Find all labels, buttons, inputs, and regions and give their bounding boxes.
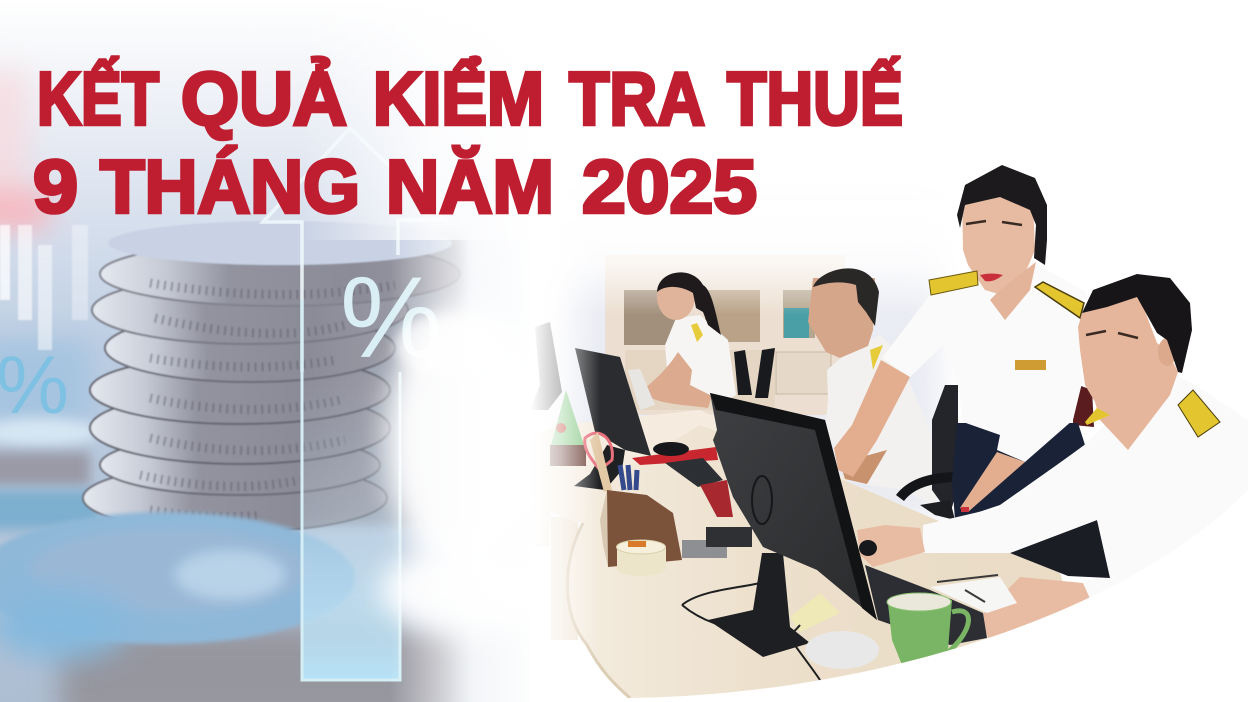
coin stack xyxy=(83,221,465,532)
person: standing woman xyxy=(834,165,1087,520)
title line 2: 2025 xyxy=(582,144,757,228)
desks xyxy=(551,410,1070,698)
keyboard front xyxy=(865,565,987,645)
black chair backs xyxy=(734,348,775,398)
icon: large percent sign: % xyxy=(340,254,442,382)
title line 1: THUẾ xyxy=(727,56,903,140)
chart bars xyxy=(0,225,88,350)
icon: green mug xyxy=(887,593,968,665)
icon: rising arrow xyxy=(263,128,445,680)
coin ribs xyxy=(140,283,395,517)
computer mouse xyxy=(859,540,877,556)
person: middle man xyxy=(808,268,937,508)
red chair back xyxy=(1073,386,1094,427)
title xyxy=(33,56,903,228)
papers and glasses xyxy=(930,577,1017,613)
title line 1: TRA xyxy=(569,56,705,140)
red telephone xyxy=(700,480,733,517)
icon: tape roll xyxy=(616,540,666,576)
office wall xyxy=(571,278,944,518)
title line 1: QUẢ xyxy=(181,56,347,140)
laptop xyxy=(628,369,655,410)
dark chair under desk xyxy=(1010,520,1110,578)
sticky note xyxy=(790,593,840,632)
keyboard back xyxy=(665,458,723,487)
person: far woman xyxy=(645,272,736,408)
title line 1: KẾT xyxy=(37,56,159,140)
icon: christmas tree ornament xyxy=(550,390,586,466)
title line 1 xyxy=(37,56,903,140)
digital scale and calculator xyxy=(682,527,752,558)
title line 2: THÁNG xyxy=(100,144,360,228)
big front coin xyxy=(0,512,355,660)
red pad and mouse xyxy=(632,442,718,465)
icon: back monitor xyxy=(534,322,562,410)
title line 2 xyxy=(33,144,757,228)
panel: office photo xyxy=(505,165,1248,702)
icon: main monitor xyxy=(708,393,877,657)
person: seated man xyxy=(857,274,1248,642)
black office chair xyxy=(900,385,958,520)
panel: coin background xyxy=(0,0,640,702)
paper mask xyxy=(805,631,879,669)
left fade of photo xyxy=(530,322,598,658)
decorative white haze xyxy=(300,0,650,702)
title line 2: NĂM xyxy=(386,144,554,228)
top fade over cabinet xyxy=(584,237,930,312)
title line 1: KIỂM xyxy=(373,56,544,140)
icon: second monitor xyxy=(574,348,651,490)
cabinet xyxy=(605,255,845,415)
title line 2: 9 xyxy=(33,144,78,228)
icon: wooden pen holder xyxy=(590,432,682,567)
scissors xyxy=(585,433,612,470)
cables xyxy=(682,583,820,680)
